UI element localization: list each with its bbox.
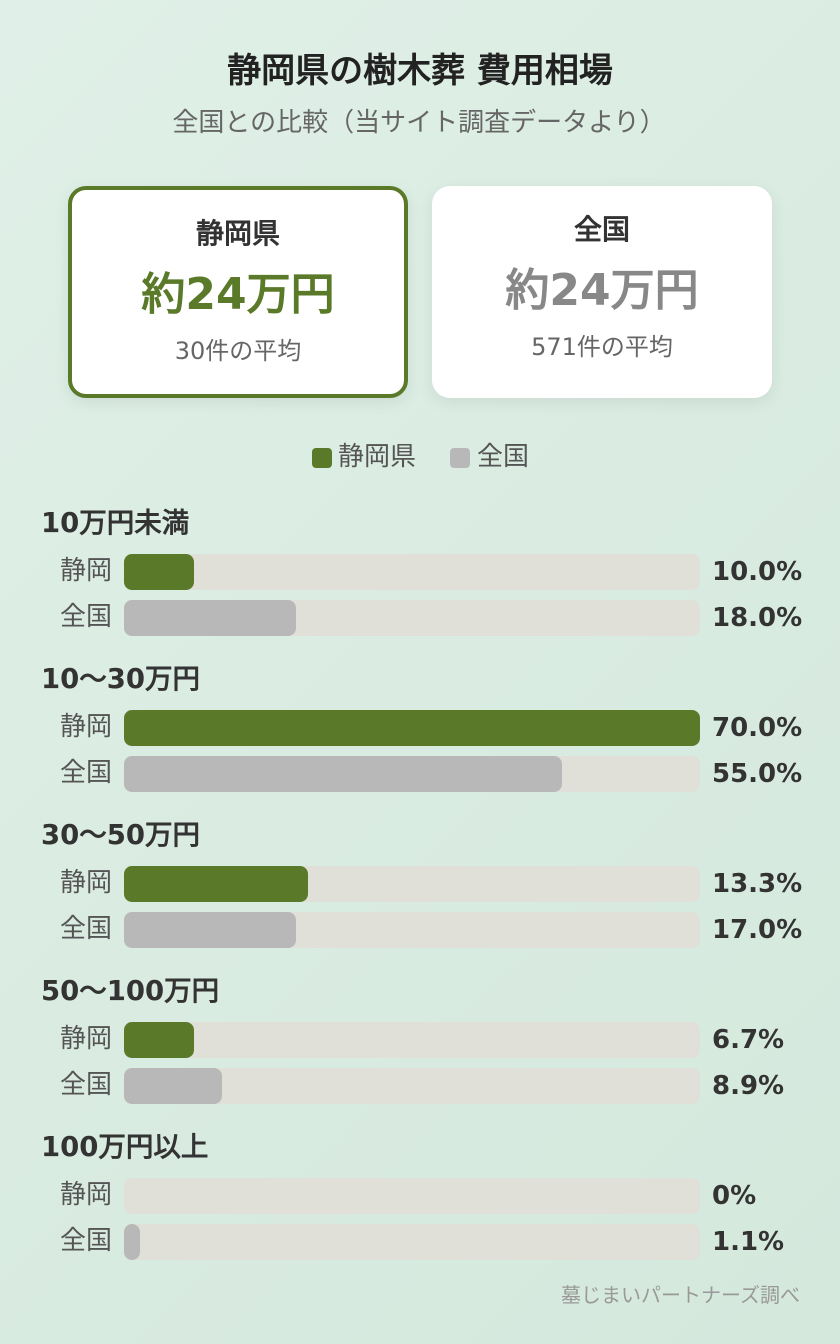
- row label: 全国: [60, 914, 112, 944]
- legend: [312, 442, 529, 472]
- bar: Shizuoka 10.0%: [124, 554, 700, 590]
- bar: national 8.9%: [124, 1068, 700, 1104]
- panel: under 100k yen: [41, 507, 802, 636]
- bar: Shizuoka 13.3%: [124, 866, 700, 902]
- row label: 静岡: [60, 556, 112, 586]
- row label: 全国: [60, 1226, 112, 1256]
- legend swatch: Shizuoka: [312, 448, 332, 468]
- value: 1.1%: [712, 1227, 784, 1257]
- legend swatch: national: [450, 448, 470, 468]
- bar: Shizuoka 6.7%: [124, 1022, 700, 1058]
- value: 10.0%: [712, 557, 802, 587]
- row label: 全国: [60, 602, 112, 632]
- bar: national 17.0%: [124, 912, 700, 948]
- row label: 全国: [60, 1070, 112, 1100]
- row label: 静岡: [60, 868, 112, 898]
- panel: 300k to 500k yen: [41, 819, 802, 948]
- range heading: 100万円以上: [41, 1131, 208, 1163]
- bar: national 1.1%: [124, 1224, 700, 1260]
- card value: Shizuoka: 約24万円: [141, 269, 335, 320]
- range heading: 30〜50万円: [41, 819, 200, 851]
- card heading: national: 全国: [574, 213, 630, 246]
- bar: Shizuoka 70.0%: [124, 710, 700, 746]
- panel: Shizuoka summary card: [68, 186, 408, 398]
- panel: 500k to 1M yen: [41, 975, 784, 1104]
- range heading: 50〜100万円: [41, 975, 219, 1007]
- title: 静岡県の樹木葬 費用相場: [227, 51, 613, 91]
- value: 8.9%: [712, 1071, 784, 1101]
- row label: 静岡: [60, 1024, 112, 1054]
- subtitle: 全国との比較（当サイト調査データより）: [172, 108, 666, 138]
- value: 18.0%: [712, 603, 802, 633]
- source note: 墓じまいパートナーズ調べ: [561, 1283, 800, 1307]
- panel: over 1M yen: [41, 1131, 784, 1260]
- panel: 100k to 300k yen: [41, 663, 802, 792]
- bar: national 55.0%: [124, 756, 700, 792]
- row label: 全国: [60, 758, 112, 788]
- range heading: 10万円未満: [41, 507, 189, 539]
- value: 6.7%: [712, 1025, 784, 1055]
- card heading: Shizuoka: 静岡県: [196, 217, 280, 250]
- bar: Shizuoka 0%: [124, 1178, 700, 1214]
- value: 13.3%: [712, 869, 802, 899]
- legend label: national: 全国: [477, 442, 529, 472]
- card note: Shizuoka: 30件の平均: [175, 337, 301, 365]
- bar: national 18.0%: [124, 600, 700, 636]
- legend label: Shizuoka: 静岡県: [338, 442, 416, 472]
- value: 0%: [712, 1181, 756, 1211]
- range heading: 10〜30万円: [41, 663, 200, 695]
- value: 17.0%: [712, 915, 802, 945]
- panel: national summary card: [432, 186, 772, 398]
- row label: 静岡: [60, 1180, 112, 1210]
- card value: national: 約24万円: [505, 265, 699, 316]
- card note: national: 571件の平均: [531, 333, 673, 361]
- value: 70.0%: [712, 713, 802, 743]
- row label: 静岡: [60, 712, 112, 742]
- value: 55.0%: [712, 759, 802, 789]
